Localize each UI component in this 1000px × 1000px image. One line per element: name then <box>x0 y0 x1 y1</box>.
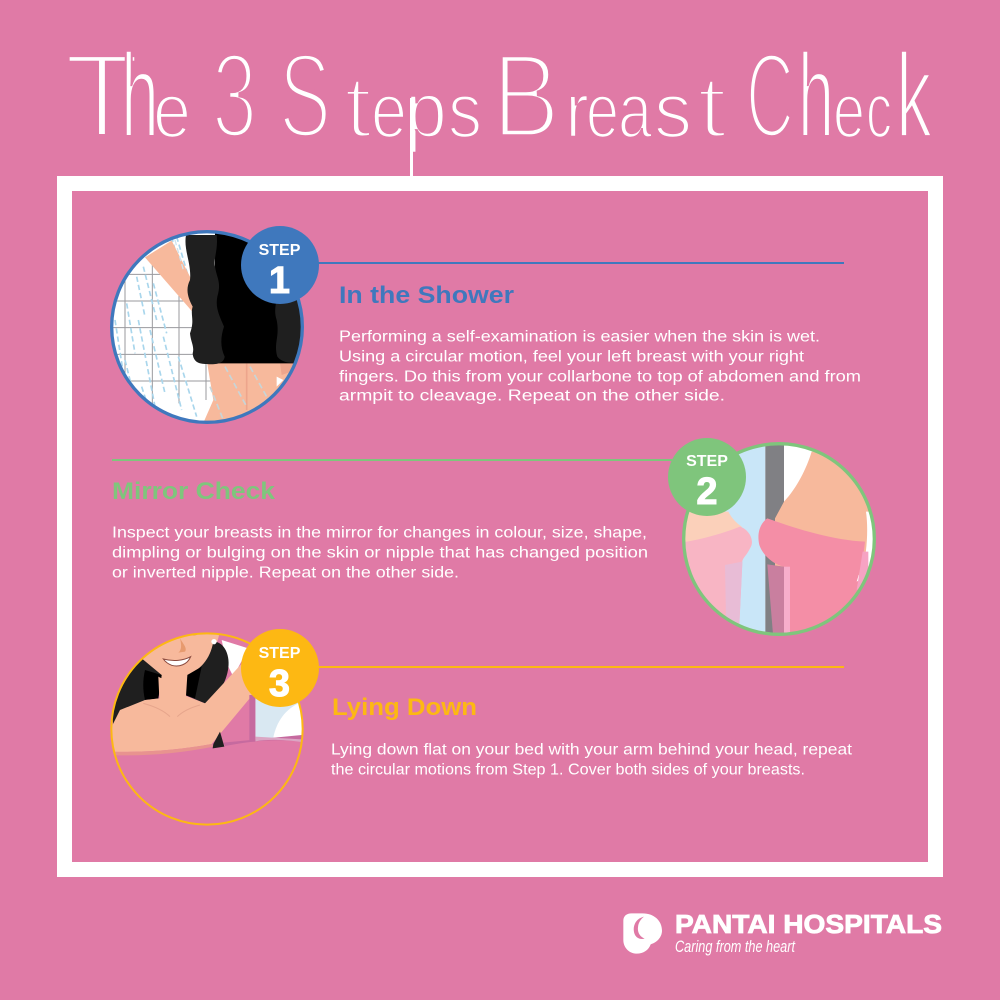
title: r <box>565 66 589 154</box>
icon: logo mark <box>623 913 662 954</box>
badge: step 2: 2 <box>696 471 718 513</box>
badge: step 2 <box>668 438 746 516</box>
heading: mirror check: Mirror Check <box>112 478 276 505</box>
logo: pantai hospitals <box>623 911 942 956</box>
badge: step 3: STEP <box>259 645 301 662</box>
text: step 2 description <box>112 524 648 582</box>
panel: step 1 in the shower <box>100 220 861 433</box>
badge: step 2: STEP <box>686 453 728 470</box>
text: step 2 description: dimpling or bulging on the skin or nipple that has changed position <box>112 544 648 562</box>
badge: step 1: 1 <box>269 260 290 302</box>
title: T <box>64 29 140 163</box>
text: step 3 description: Lying down flat on your bed with your arm behind your head, repeat <box>331 742 853 758</box>
badge: step 3: 3 <box>269 663 290 705</box>
white frame <box>64 184 936 870</box>
text: step 1 description: Using a circular motion, feel your left breast with your right <box>339 348 805 366</box>
title: C <box>746 29 794 163</box>
illustration: mirror <box>682 442 876 636</box>
tagline: Caring from the heart <box>675 937 796 956</box>
heading: lying down: Lying Down <box>332 694 477 721</box>
heading: in the shower: In the Shower <box>339 282 514 309</box>
badge: step 1 <box>241 226 319 304</box>
text: step 1 description <box>339 328 861 404</box>
text: step 1 description: armpit to cleavage. Repeat on the other side. <box>339 388 725 404</box>
panel: step 2 mirror check <box>112 435 887 645</box>
text: step 3 description <box>331 742 853 778</box>
title: 3 <box>212 29 257 163</box>
connector line: step 3 <box>316 666 844 668</box>
title: B <box>492 29 560 163</box>
title: h <box>121 29 159 163</box>
title: s <box>654 66 692 154</box>
text: step 2 description: or inverted nipple. Repeat on the other side. <box>112 564 459 582</box>
connector line: step 1 <box>316 262 844 264</box>
text: step 1 description: Performing a self-examination is easier when the skin is wet. <box>339 328 820 346</box>
text: step 3 description: the circular motions from Step 1. Cover both sides of your breasts. <box>331 762 805 778</box>
text: step 1 description: fingers. Do this from your collarbone to top of abdomen and from <box>339 368 861 386</box>
title: a <box>618 66 652 154</box>
title: c <box>866 66 892 154</box>
title: t <box>697 57 727 156</box>
panel: step 3 lying down <box>110 629 853 825</box>
title <box>64 29 933 178</box>
illustration: lying down <box>110 630 307 825</box>
illustration: shower <box>110 230 304 424</box>
wordmark: PANTAI HOSPITALS <box>675 911 942 939</box>
badge: step 1: STEP <box>259 242 301 259</box>
title: e <box>833 66 865 154</box>
title: S <box>279 29 331 163</box>
title: p <box>405 66 447 154</box>
title: h <box>798 29 834 163</box>
title: e <box>153 66 191 154</box>
connector line: step 2 <box>112 459 672 461</box>
title: k <box>896 29 933 163</box>
badge: step 3 <box>241 629 319 707</box>
title: e <box>586 66 619 154</box>
title: e <box>371 66 407 154</box>
title: t <box>344 57 372 156</box>
title: s <box>448 66 482 154</box>
text: step 2 description: Inspect your breasts in the mirror for changes in colour, size, shape, <box>112 524 647 542</box>
